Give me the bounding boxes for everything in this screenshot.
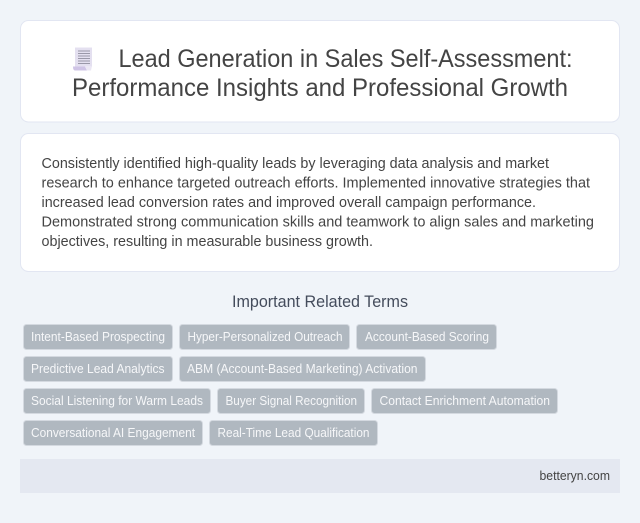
- tag: Hyper-Personalized Outreach: [180, 324, 350, 350]
- tag: Intent-Based Prospecting: Intent-Based Prospecting: [31, 330, 165, 344]
- title: line 1: Lead Generation in Sales Self-Assessment:: [118, 45, 572, 73]
- tag: Account-Based Scoring: [356, 324, 496, 350]
- tag: Contact Enrichment Automation: Contact Enrichment Automation: [380, 394, 550, 408]
- tag: Conversational AI Engagement: [24, 420, 202, 446]
- panel: summary paragraph: [20, 134, 620, 272]
- tag: Real-Time Lead Qualification: [210, 420, 378, 446]
- summary line 4: Demonstrated strong communication skills and teamwork to align sales and marketing: [42, 214, 594, 230]
- tag: Account-Based Scoring: Account-Based Scoring: [365, 330, 489, 344]
- icon: scroll document: [73, 48, 92, 70]
- heading: related terms: Important Related Terms: [232, 293, 408, 311]
- tag: Predictive Lead Analytics: Predictive Lead Analytics: [31, 362, 164, 376]
- footer: source site: betteryn.com: [540, 469, 610, 483]
- tag group: related terms: [24, 324, 558, 446]
- summary line 5: objectives, resulting in measurable business growth.: [42, 234, 373, 250]
- tag: Intent-Based Prospecting: [24, 324, 172, 350]
- tag: Social Listening for Warm Leads: Social Listening for Warm Leads: [31, 394, 203, 408]
- tag: Predictive Lead Analytics: [24, 356, 172, 382]
- tag: Contact Enrichment Automation: [372, 388, 558, 414]
- tag: ABM Activation: ABM (Account-Based Marketing) Activation: [187, 362, 418, 376]
- tag: Buyer Signal Recognition: [218, 388, 364, 414]
- tag: Real-Time Lead Qualification: Real-Time Lead Qualification: [218, 426, 370, 440]
- tag: Buyer Signal Recognition: Buyer Signal Recognition: [226, 394, 357, 408]
- footer bar: [20, 459, 620, 493]
- title: line 2: Performance Insights and Professional Growth: [72, 74, 568, 102]
- tag: ABM Activation: [180, 356, 426, 382]
- tag: Hyper-Personalized Outreach: Hyper-Personalized Outreach: [188, 330, 342, 344]
- tag: Conversational AI Engagement: Conversational AI Engagement: [31, 426, 195, 440]
- summary line 3: increased lead conversion rates and improved overall campaign performance.: [42, 195, 536, 211]
- summary line 1: Consistently identified high-quality leads by leveraging data analysis and market: [42, 156, 549, 172]
- summary line 2: research to enhance targeted outreach efforts. Implemented innovative strategies that: [42, 176, 590, 192]
- tag: Social Listening for Warm Leads: [24, 388, 210, 414]
- panel: title card: [20, 20, 620, 122]
